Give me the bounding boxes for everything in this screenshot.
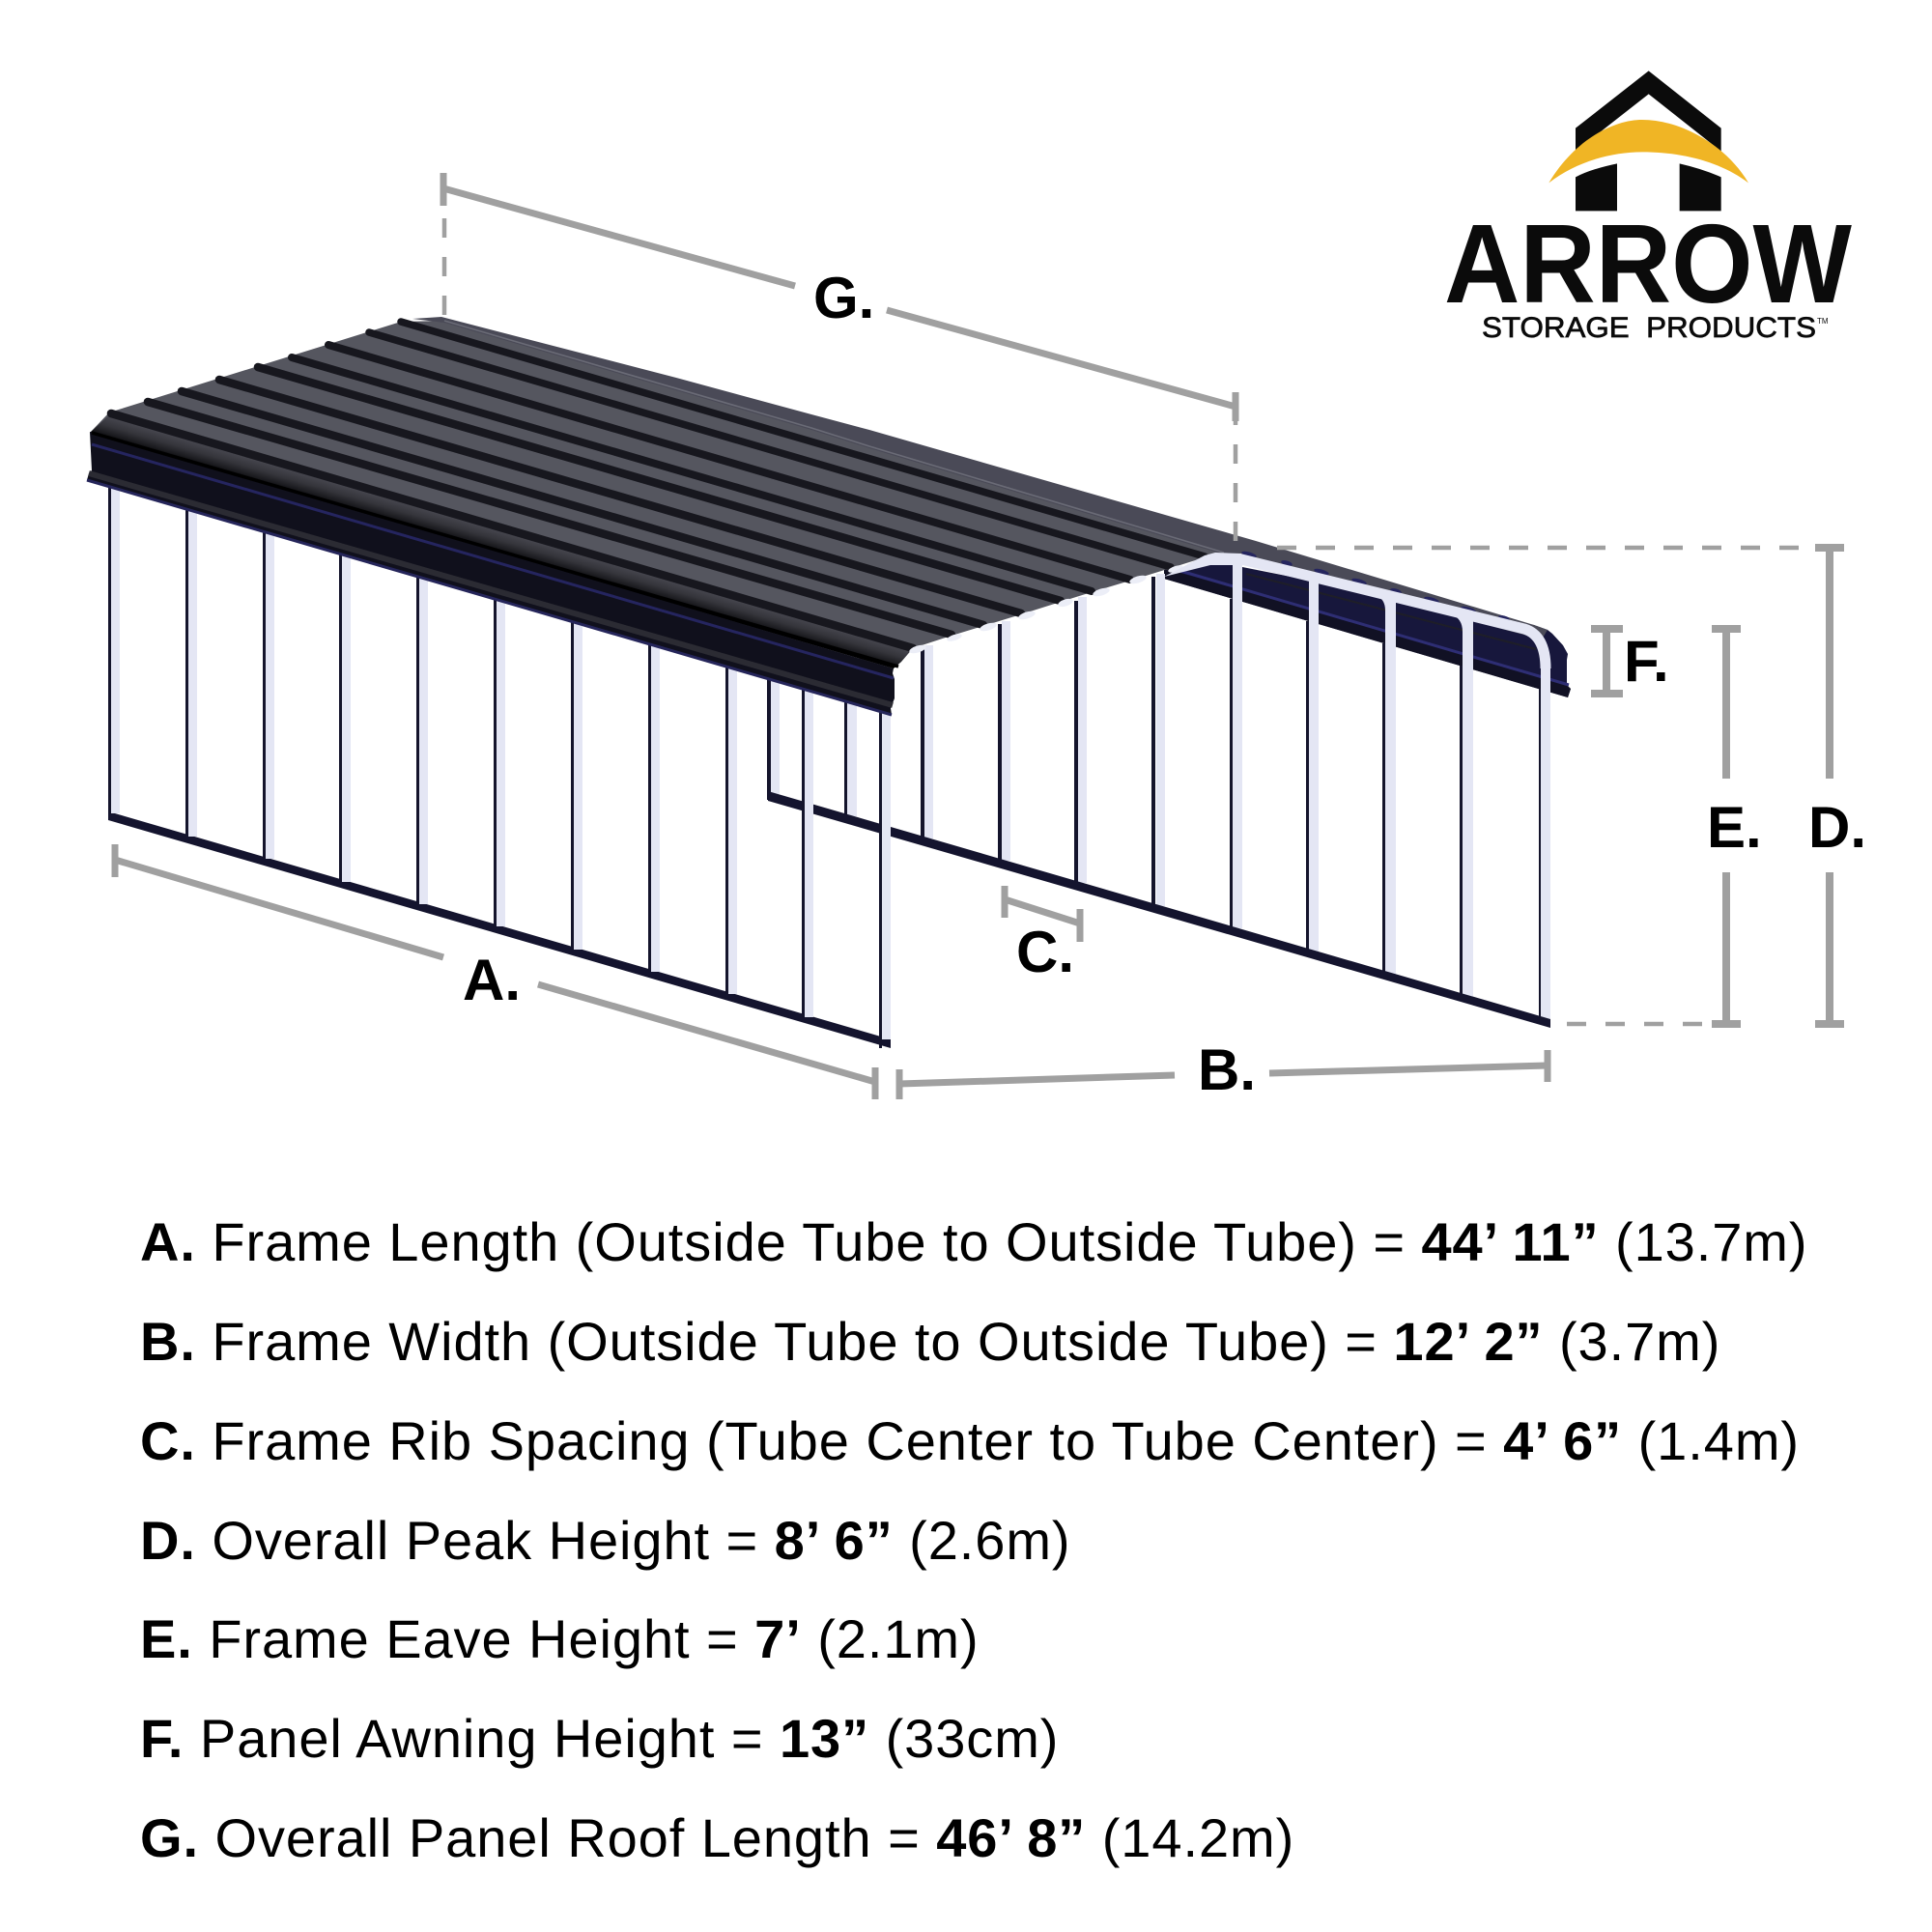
far wall frame tubes	[767, 560, 1550, 1019]
icon: house with yellow arc	[1548, 71, 1748, 211]
dimension D	[1815, 546, 1844, 1024]
dimension G	[443, 173, 1236, 541]
dimension E	[1712, 628, 1741, 1024]
dimension C	[1005, 886, 1080, 942]
spec B: B. Frame Width (Outside Tube to Outside Tube) = 12’ 2” (3.7m)	[140, 1311, 1720, 1372]
front fascia	[87, 432, 898, 715]
near bottom rail	[108, 811, 891, 1048]
dimension letter labels: B.	[1198, 1037, 1256, 1102]
rafter end frame	[1164, 553, 1546, 668]
spec G: G. Overall Panel Roof Length = 46’ 8” (14.2m)	[140, 1807, 1294, 1868]
front gable edge scallops	[908, 564, 1184, 655]
trademark: TM	[1817, 317, 1829, 326]
Arrow Storage Products logo	[1444, 71, 1852, 344]
back fascia	[1164, 565, 1571, 697]
carport diagram with dimension lines and logo	[87, 71, 1866, 1102]
logo wordmark: ARROW	[1444, 201, 1852, 327]
spec D: D. Overall Peak Height = 8’ 6” (2.6m)	[140, 1510, 1070, 1571]
far bottom rail	[768, 791, 1550, 1028]
near wall frame tubes	[108, 481, 891, 1048]
dimension F	[1591, 628, 1623, 694]
dimension letter labels: C.	[1016, 920, 1074, 984]
dimension B	[899, 1050, 1548, 1099]
dimension lines	[115, 173, 1844, 1099]
spec A: A. Frame Length (Outside Tube to Outside Tube) = 44’ 11” (13.7m)	[140, 1211, 1807, 1272]
specification list	[140, 1211, 1807, 1868]
dimension letter labels: D.	[1808, 795, 1866, 860]
roof ribs	[111, 322, 1205, 648]
dimension letter labels: E.	[1707, 795, 1762, 860]
eave gradient band	[90, 413, 913, 668]
spec E: E. Frame Eave Height = 7’ (2.1m)	[140, 1608, 980, 1669]
roof panel	[90, 317, 1548, 668]
spec C: C. Frame Rib Spacing (Tube Center to Tube Center) = 4’ 6” (1.4m)	[140, 1410, 1800, 1471]
spec F: F. Panel Awning Height = 13” (33cm)	[140, 1708, 1059, 1769]
dimension letter labels	[463, 266, 1866, 1102]
dimension letter labels: F.	[1624, 629, 1669, 694]
dimension A	[115, 844, 875, 1099]
dimension letter labels: A.	[463, 948, 521, 1012]
logo tagline: STORAGE PRODUCTS	[1482, 312, 1816, 344]
navy dashes along rafter	[1241, 550, 1510, 622]
dimension letter labels: G.	[813, 266, 874, 330]
dashed extension lines	[1277, 548, 1811, 1024]
